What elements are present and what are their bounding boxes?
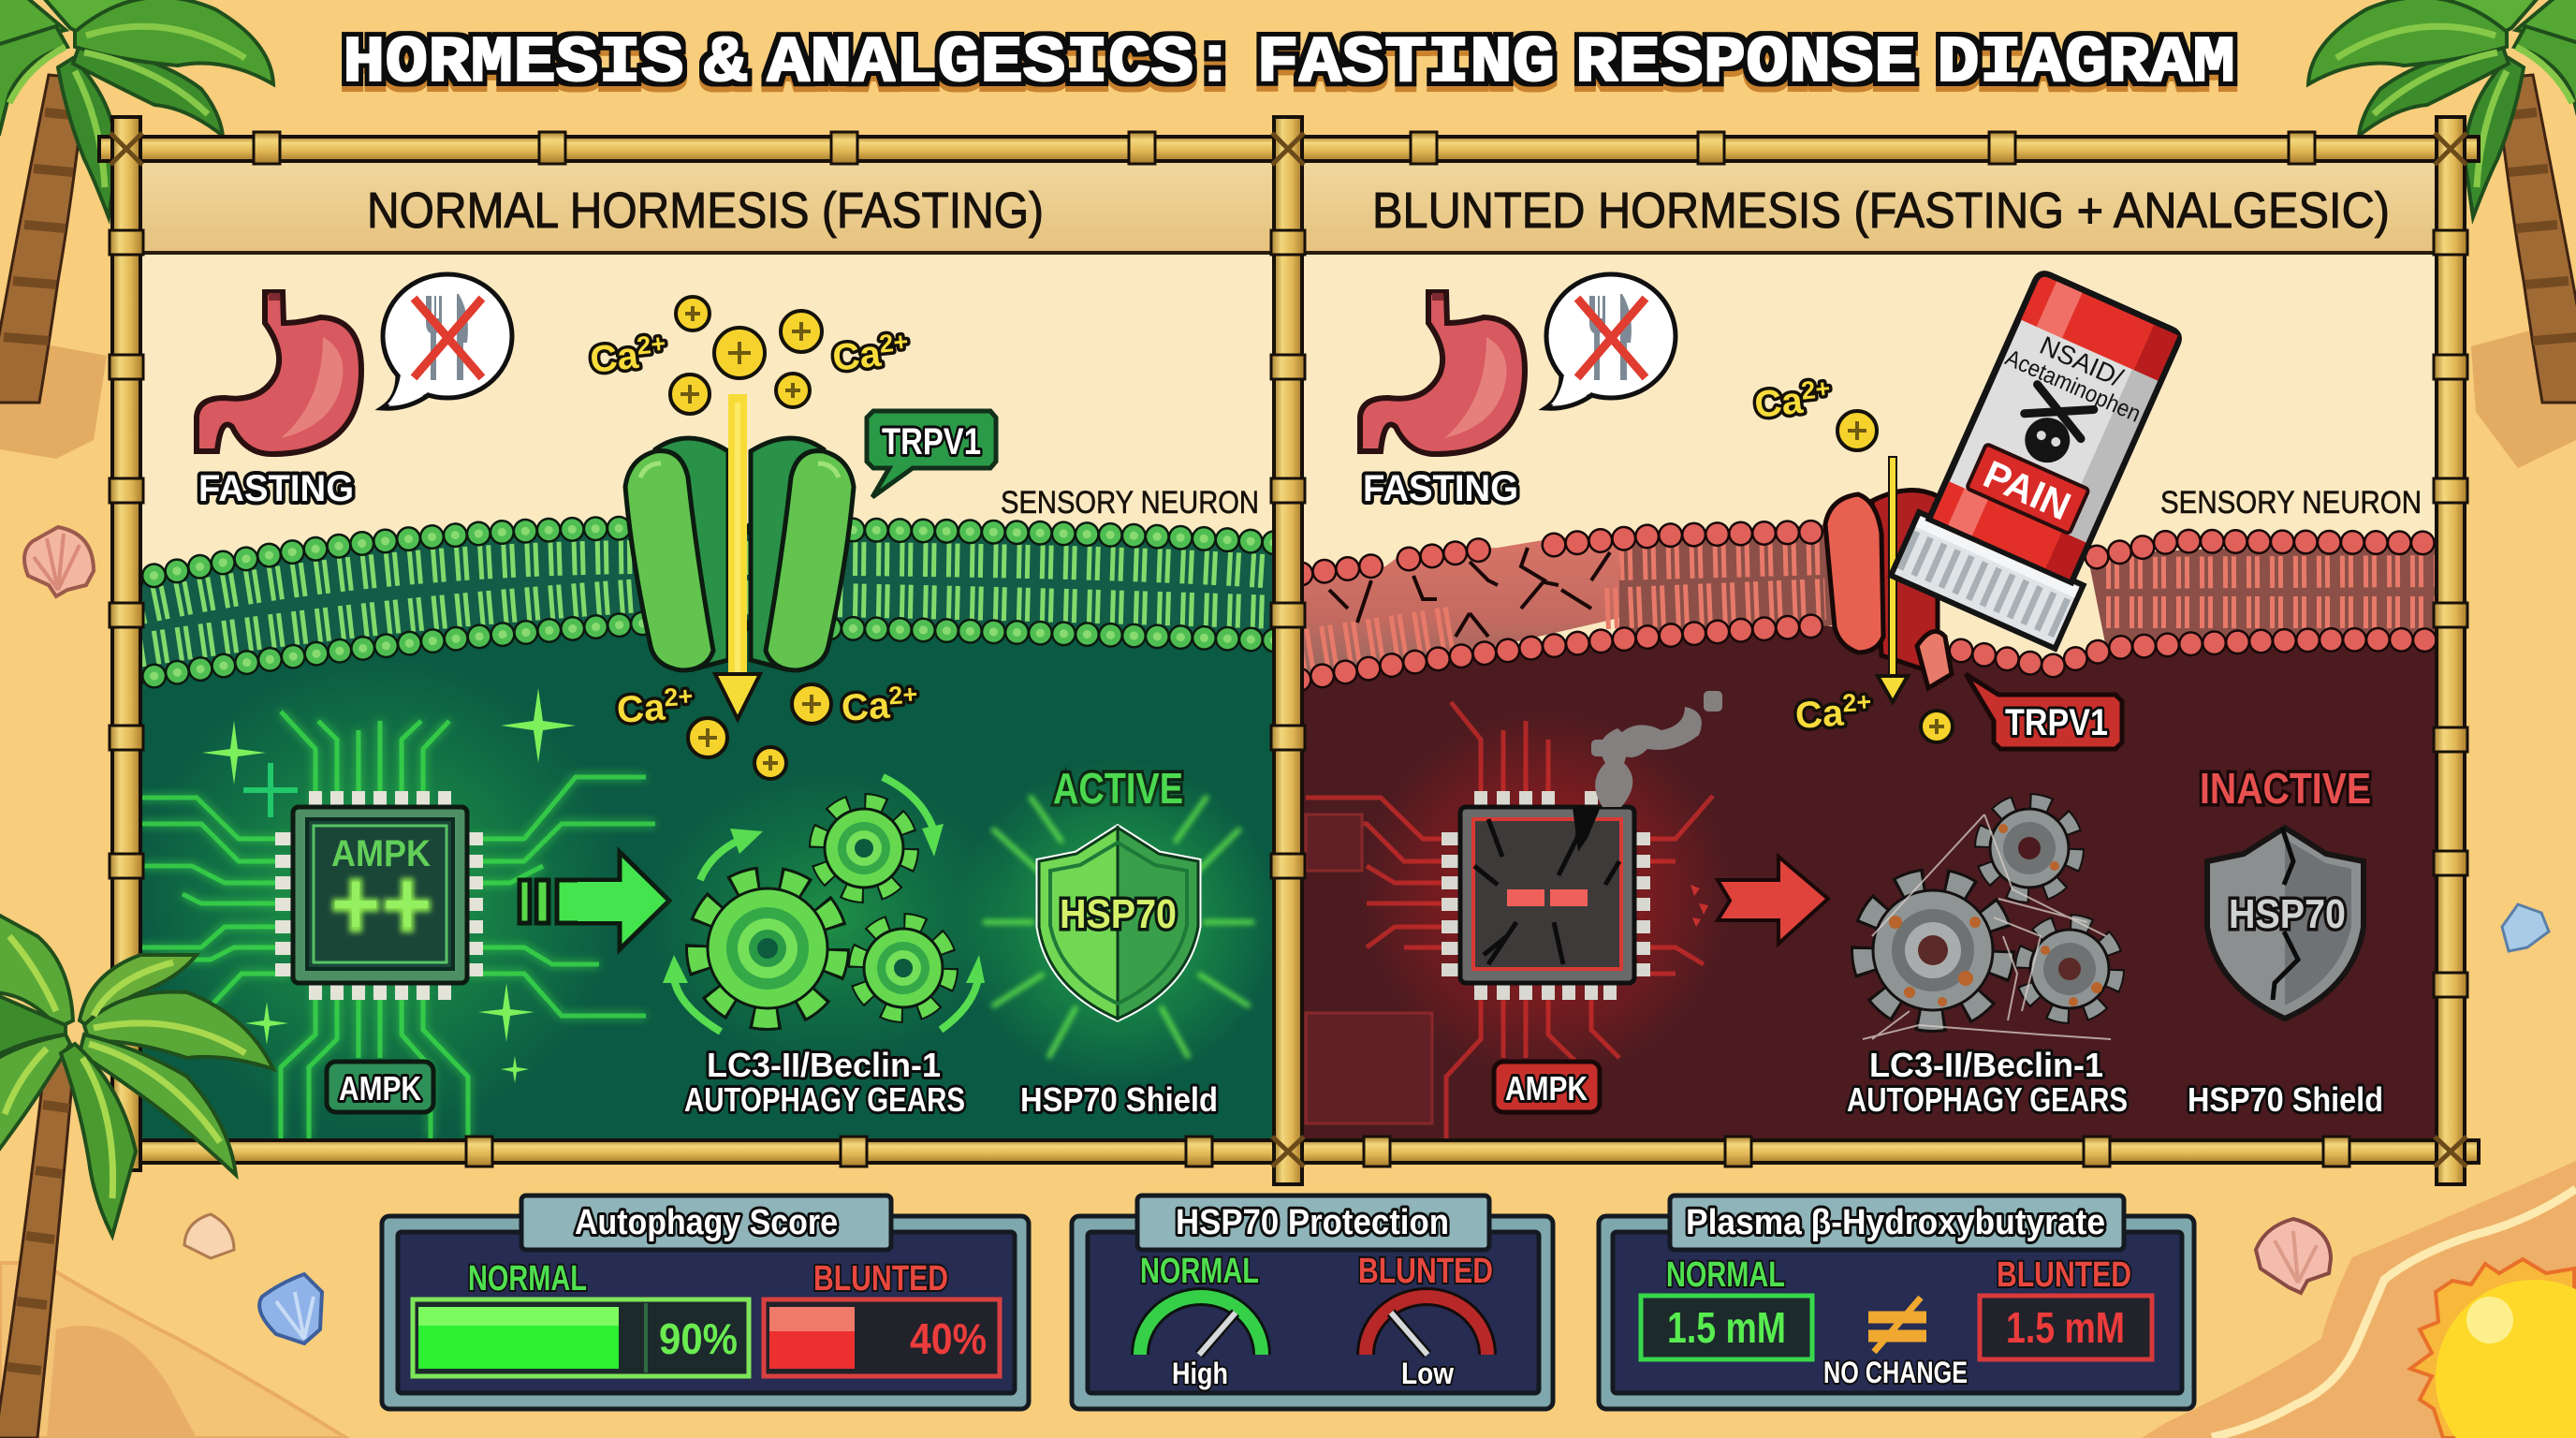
tab (1670, 1196, 2124, 1250)
arrow: broken (1690, 857, 1828, 944)
stat panel: plasma beta-hydroxybutyrate (1599, 1196, 2194, 1409)
analgesic bottle (1891, 266, 2193, 649)
panel header: normal (139, 161, 1275, 255)
label: blunted: BLUNTED (1997, 1255, 2131, 1295)
label: gears: LC3-II/Beclin-1 (1869, 1046, 2103, 1084)
title: HORMESIS & ANALGESICS: FASTING RESPONSE DIAGRAM (343, 27, 2235, 101)
panel header: blunted: BLUNTED HORMESIS (FASTING + ANALGESIC) (1372, 183, 2390, 239)
shell: pink right (2256, 1219, 2331, 1293)
tab: HSP70 Protection (1176, 1203, 1449, 1242)
panel header: normal: NORMAL HORMESIS (FASTING) (367, 183, 1044, 239)
gauge: low: Low (1401, 1357, 1454, 1390)
label: fasting: FASTING (198, 468, 354, 509)
tab: Autophagy Score (575, 1203, 838, 1242)
gauge: high: High (1172, 1357, 1228, 1390)
label: shield: HSP70 Shield (2188, 1080, 2383, 1119)
panel: normal hormesis (131, 161, 1281, 1142)
palm tree: top right (2308, 0, 2576, 403)
label: gears: AUTOPHAGY GEARS (1847, 1080, 2128, 1119)
panel: blunted hormesis (1292, 161, 2443, 1142)
calcium arrow (715, 394, 760, 719)
Ca2+ labels: 2+ (636, 330, 667, 360)
PAIN box: PAIN (1977, 452, 2077, 529)
label: TRPV1: TRPV1 (2005, 702, 2108, 743)
gears: autophagy active (663, 773, 985, 1039)
label: AMPK: AMPK (1505, 1069, 1588, 1108)
icon: not equal (1868, 1298, 1926, 1352)
label: normal: NORMAL (1666, 1255, 1785, 1295)
shield: HSP70 inactive (2207, 828, 2364, 1019)
circuit traces: green (140, 712, 655, 1138)
gauge: high (1140, 1297, 1262, 1390)
Ca2+ labels: Ca (841, 685, 891, 729)
intracellular background: green (131, 623, 1278, 1142)
tab (1137, 1196, 1489, 1250)
label: active: ACTIVE (1053, 764, 1183, 813)
icon: stomach (197, 292, 361, 454)
label: fasting: FASTING (1363, 468, 1518, 509)
shell: pink left (24, 527, 94, 596)
Ca2+ labels: 2+ (878, 328, 910, 359)
cell membrane: damaged (1299, 524, 2443, 680)
shield: HSP70 inactive: HSP70 (2229, 891, 2346, 937)
bar: blunted 40% (764, 1299, 1000, 1376)
stat panel: autophagy score (382, 1196, 1029, 1409)
sparkles (202, 688, 576, 1083)
glow behind chip (1359, 708, 1734, 1082)
label: normal: NORMAL (468, 1259, 587, 1299)
calcium arrow: weak (1878, 457, 1908, 702)
icon: skull and crossbones (2009, 385, 2094, 473)
gauge: low (1366, 1297, 1487, 1390)
label: sensory neuron: SENSORY NEURON (1001, 485, 1259, 521)
chip: AMPK damaged (1442, 791, 1650, 1000)
Ca2+ labels: Ca (1794, 693, 1845, 737)
label: TRPV1: TRPV1 (882, 421, 981, 462)
TRPV1 channel: blocked (1825, 491, 1952, 688)
Ca2+ labels: 2+ (1800, 374, 1832, 405)
label: sensory neuron: SENSORY NEURON (2160, 485, 2422, 521)
label: gears: LC3-II/Beclin-1 (707, 1046, 941, 1084)
Ca2+ labels: Ca (1752, 380, 1805, 426)
chip: AMPK active (275, 791, 483, 1000)
Ca2+ labels: 2+ (1841, 687, 1872, 717)
tab (521, 1196, 891, 1250)
bar: normal 90%: 90% (659, 1314, 738, 1363)
label: gears (684, 1046, 965, 1119)
Ca2+ labels (588, 328, 919, 731)
label: AMPK (327, 1062, 433, 1112)
bar: blunted 40%: 40% (910, 1314, 987, 1363)
Ca2+ labels: 2+ (663, 682, 694, 712)
value: blunted 1.5 mM (1980, 1296, 2152, 1359)
shell: blue left (259, 1274, 322, 1343)
label: gears (1847, 1046, 2128, 1119)
gears: rusty with webs (1863, 803, 2115, 1039)
circuit traces: red, with dim windows (1306, 702, 1713, 1138)
Ca2+ labels: 2+ (887, 680, 918, 710)
glow behind chip (167, 682, 591, 1101)
label: TRPV1 (1966, 674, 2122, 749)
palm tree: top left (0, 0, 273, 403)
Ca2+ labels: Ca (830, 333, 883, 379)
shield: HSP70 active (972, 770, 1265, 1069)
arrow: activation (520, 852, 669, 949)
icon: no food bubble (1545, 274, 1676, 408)
palm tree: lower left (0, 916, 273, 1438)
sun (2410, 1259, 2576, 1438)
bar: normal 90% (413, 1299, 749, 1376)
intracellular background: red (1292, 625, 2443, 1142)
cell membrane: green (131, 528, 1278, 680)
icon: no food bubble (382, 274, 512, 408)
bottle label text: NSAID/ (2036, 330, 2128, 392)
bamboo frame (99, 117, 2479, 1184)
Ca2+ labels: Ca (588, 335, 640, 381)
label: blunted: BLUNTED (813, 1259, 948, 1299)
panel header: blunted (1301, 161, 2437, 255)
label: normal: NORMAL (1140, 1252, 1259, 1291)
label: AMPK (1494, 1062, 1600, 1112)
label: inactive: INACTIVE (2200, 764, 2371, 813)
value: normal 1.5 mM (1641, 1296, 1812, 1359)
label: AMPK: AMPK (339, 1069, 421, 1108)
calcium ions (1837, 411, 1953, 742)
label: no change: NO CHANGE (1823, 1356, 1968, 1389)
stat panel: HSP70 protection (1072, 1196, 1553, 1409)
value: blunted 1.5 mM: 1.5 mM (2006, 1303, 2125, 1352)
calcium ions (670, 297, 831, 779)
tab: Plasma β-Hydroxybutyrate (1686, 1203, 2105, 1242)
smoke (1591, 691, 1722, 807)
icon: stomach (1360, 292, 1525, 454)
label: shield: HSP70 Shield (1020, 1080, 1218, 1119)
shell: peach (184, 1214, 234, 1258)
value: normal 1.5 mM: 1.5 mM (1667, 1303, 1786, 1352)
bottle label text: Acetaminophen (2001, 345, 2144, 428)
shell: blue right (2502, 904, 2549, 951)
Ca2+ labels: Ca (616, 687, 666, 731)
label: gears: AUTOPHAGY GEARS (684, 1080, 965, 1119)
label: blunted: BLUNTED (1358, 1252, 1493, 1291)
shield: HSP70 active: HSP70 (1060, 891, 1177, 937)
TRPV1 channel (625, 438, 854, 670)
Ca2+ labels (1752, 374, 1873, 737)
chip: AMPK active: AMPK (331, 833, 431, 874)
label: TRPV1 (867, 411, 996, 497)
